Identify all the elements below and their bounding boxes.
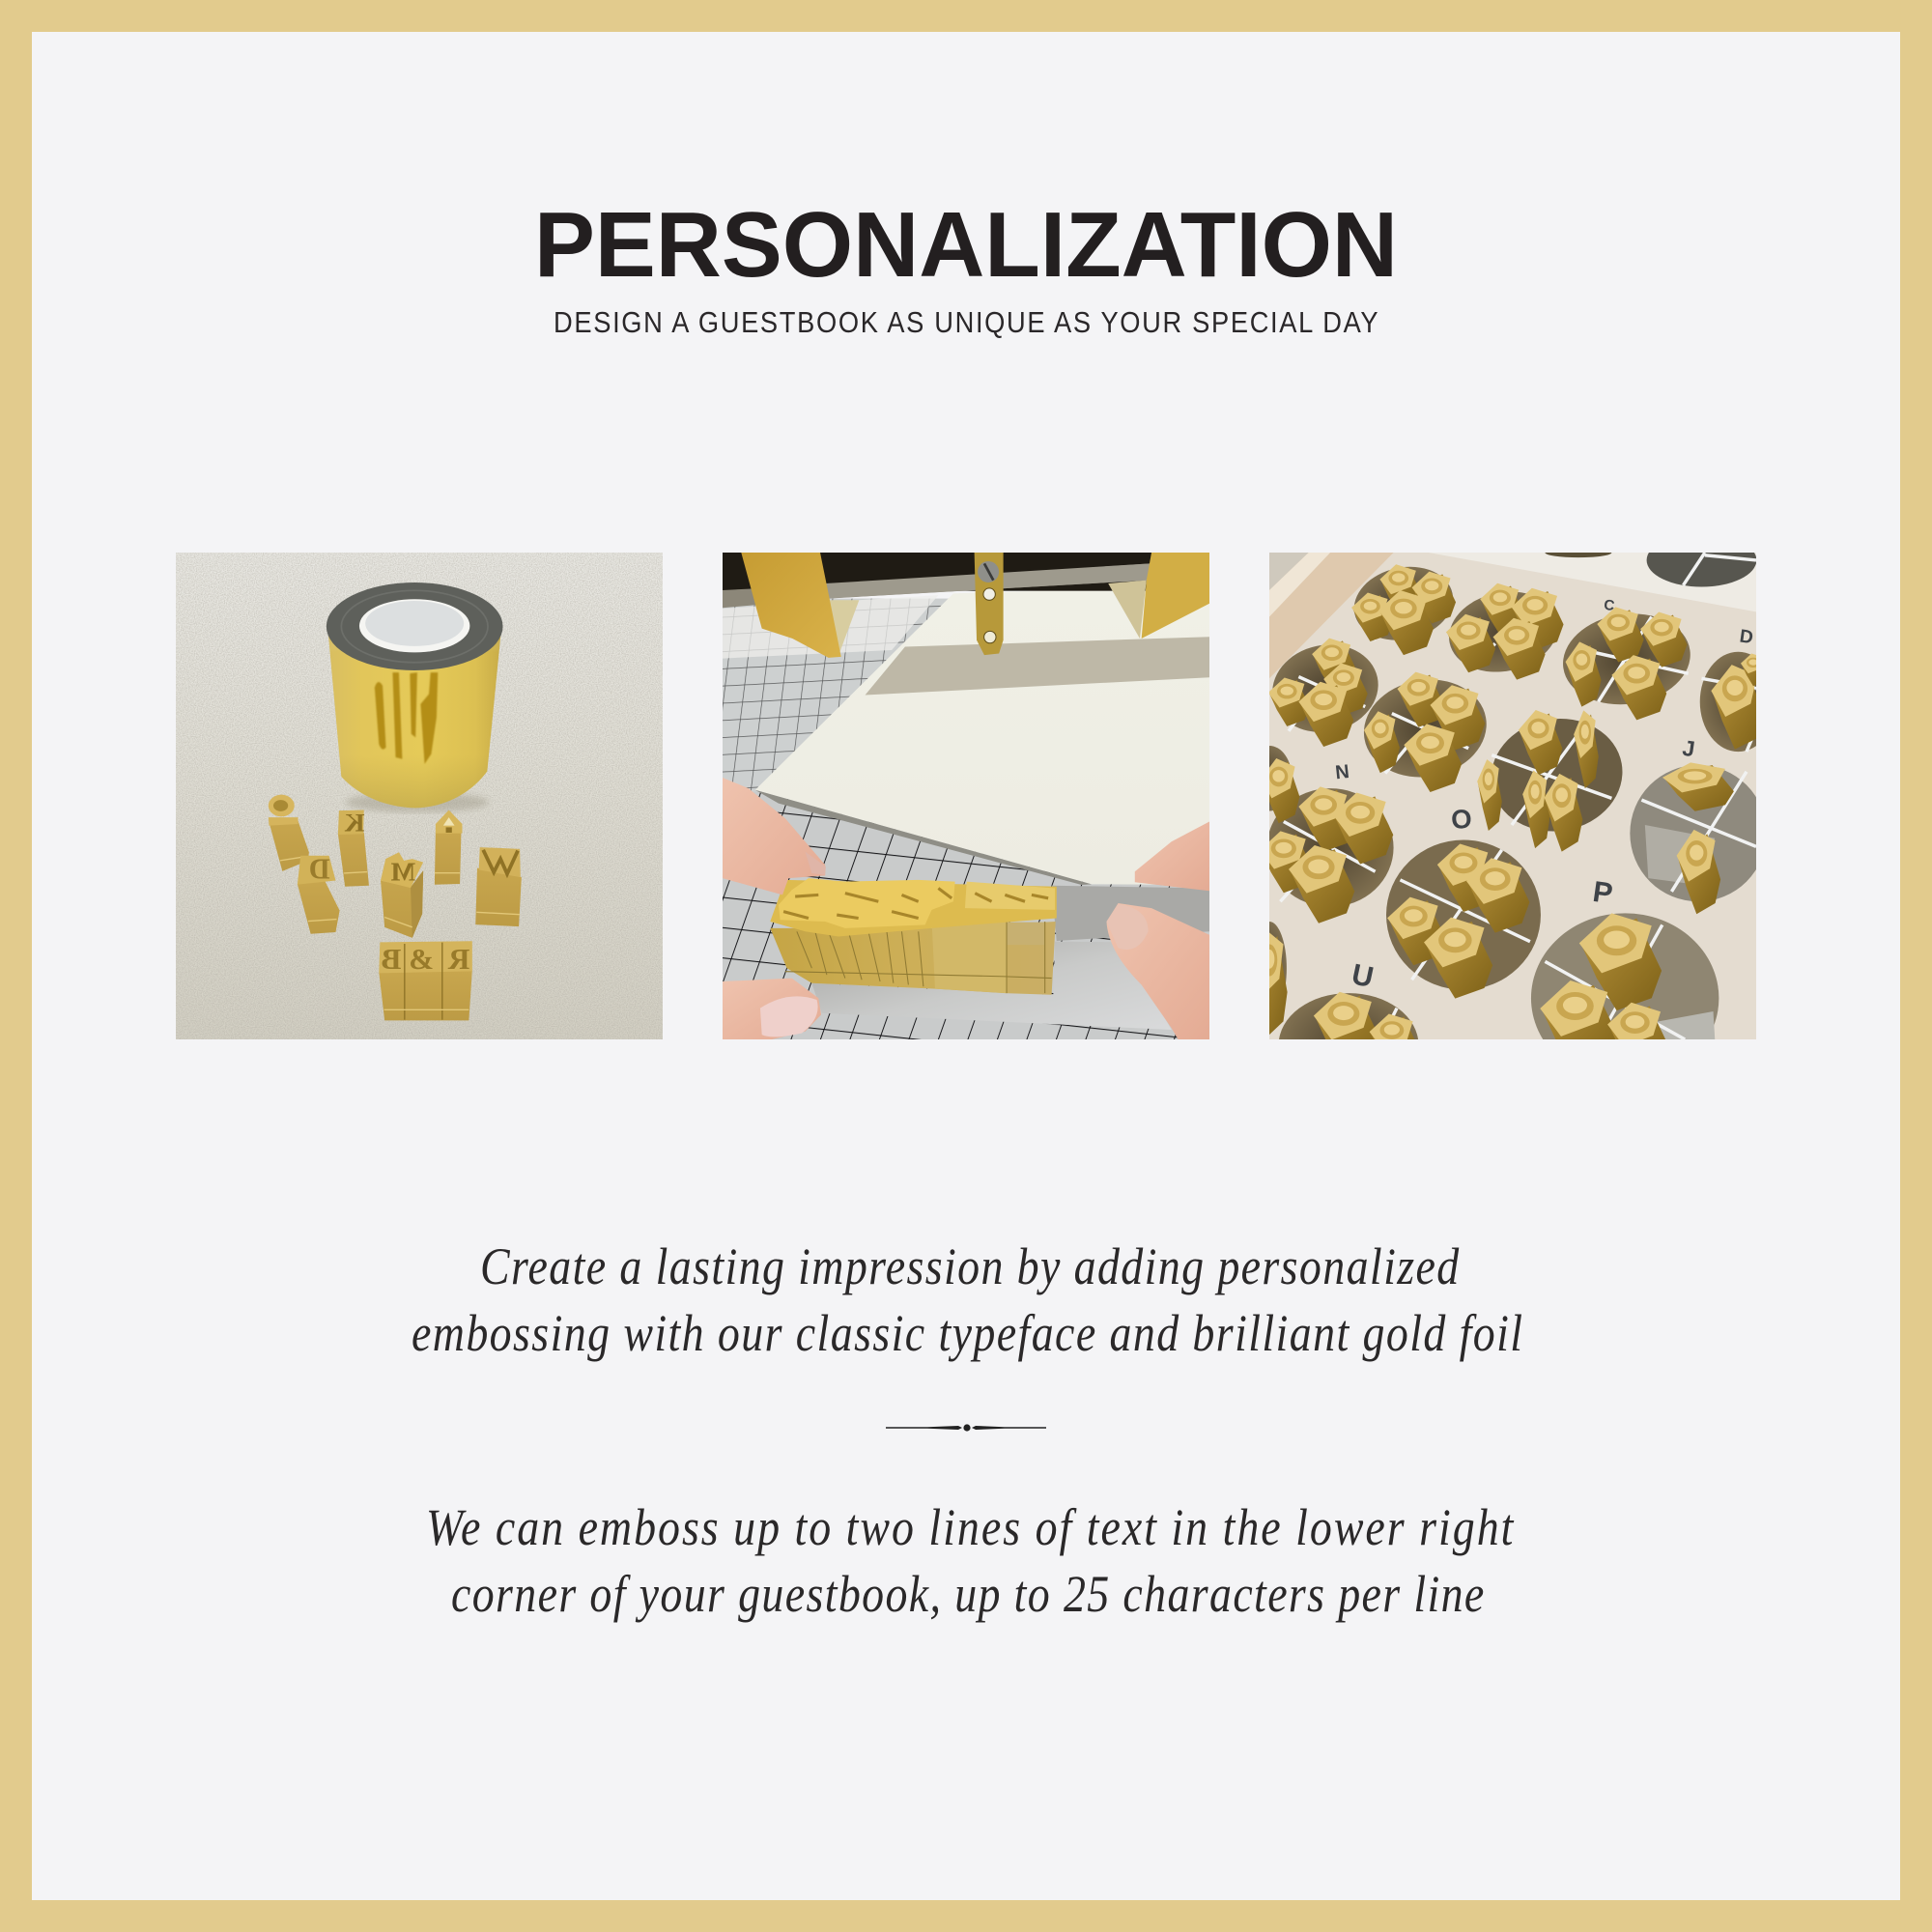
stamps B and R: R [447, 942, 469, 976]
right gold bracket [1108, 553, 1209, 639]
linen background [176, 553, 663, 1039]
stamp W [475, 847, 522, 926]
left gold bracket [741, 553, 859, 658]
title: PERSONALIZATION [534, 193, 1398, 297]
stamp K: K [344, 809, 364, 838]
stamp D [298, 852, 340, 934]
printed alphabet labels on the tray [1334, 597, 1754, 994]
text block: emboss details [426, 1498, 1514, 1623]
text block: lasting impression [412, 1237, 1522, 1362]
printed alphabet labels on the tray: D [1738, 627, 1754, 648]
stamp A [435, 810, 462, 885]
photo: alphabet tray of brass letter stamps [1269, 553, 1756, 1039]
printed alphabet labels on the tray: U [1349, 958, 1377, 994]
photo: gold foil roll and brass letter stamps [176, 553, 663, 1039]
text block: lasting impression: Create a lasting impression by adding personalized [480, 1237, 1460, 1295]
photo: brass type being set above a cutting mat [723, 553, 1209, 1039]
centre brass strip with screw [975, 553, 1004, 655]
right thumb [1106, 903, 1209, 1039]
stamp O [269, 795, 309, 871]
tray board [1269, 553, 1756, 1039]
wooden tray corner [1269, 553, 1756, 678]
brass type block [770, 878, 1057, 995]
foil roll [327, 582, 503, 812]
right fingertip [1135, 822, 1209, 891]
printed alphabet labels on the tray: J [1681, 735, 1696, 761]
stamp M [381, 852, 423, 938]
printed alphabet labels on the tray: C [1603, 597, 1615, 614]
printed alphabet labels on the tray: N [1334, 761, 1350, 783]
white paper sheet [755, 585, 1209, 885]
stamps B and R: & [409, 942, 434, 976]
subtitle: DESIGN A GUESTBOOK AS UNIQUE AS YOUR SPECIAL DAY [554, 306, 1378, 339]
text block: emboss details: We can emboss up to two lines of text in the lower right [426, 1498, 1514, 1556]
left index finger [723, 778, 826, 895]
stamps B and R: B [382, 942, 401, 976]
left thumb [723, 979, 821, 1039]
text block: lasting impression: embossing with our classic typeface and brilliant gold foil [412, 1304, 1522, 1362]
text block: emboss details: corner of your guestbook, up to 25 characters per line [451, 1565, 1484, 1623]
brass stamps in the tray [1254, 564, 1768, 1074]
stamp M: M [390, 857, 415, 887]
cutting mat [723, 595, 1209, 1039]
machine dark housing [723, 553, 1209, 608]
printed alphabet labels on the tray: P [1591, 876, 1614, 910]
stamp D: D [309, 852, 330, 885]
stamp K [338, 809, 369, 887]
tray holes with dividers [1247, 533, 1776, 1096]
ornamental divider [886, 1424, 1046, 1432]
silver metal plate [811, 886, 1209, 1030]
stamps B and R [379, 941, 472, 1020]
printed alphabet labels on the tray: O [1450, 804, 1473, 835]
